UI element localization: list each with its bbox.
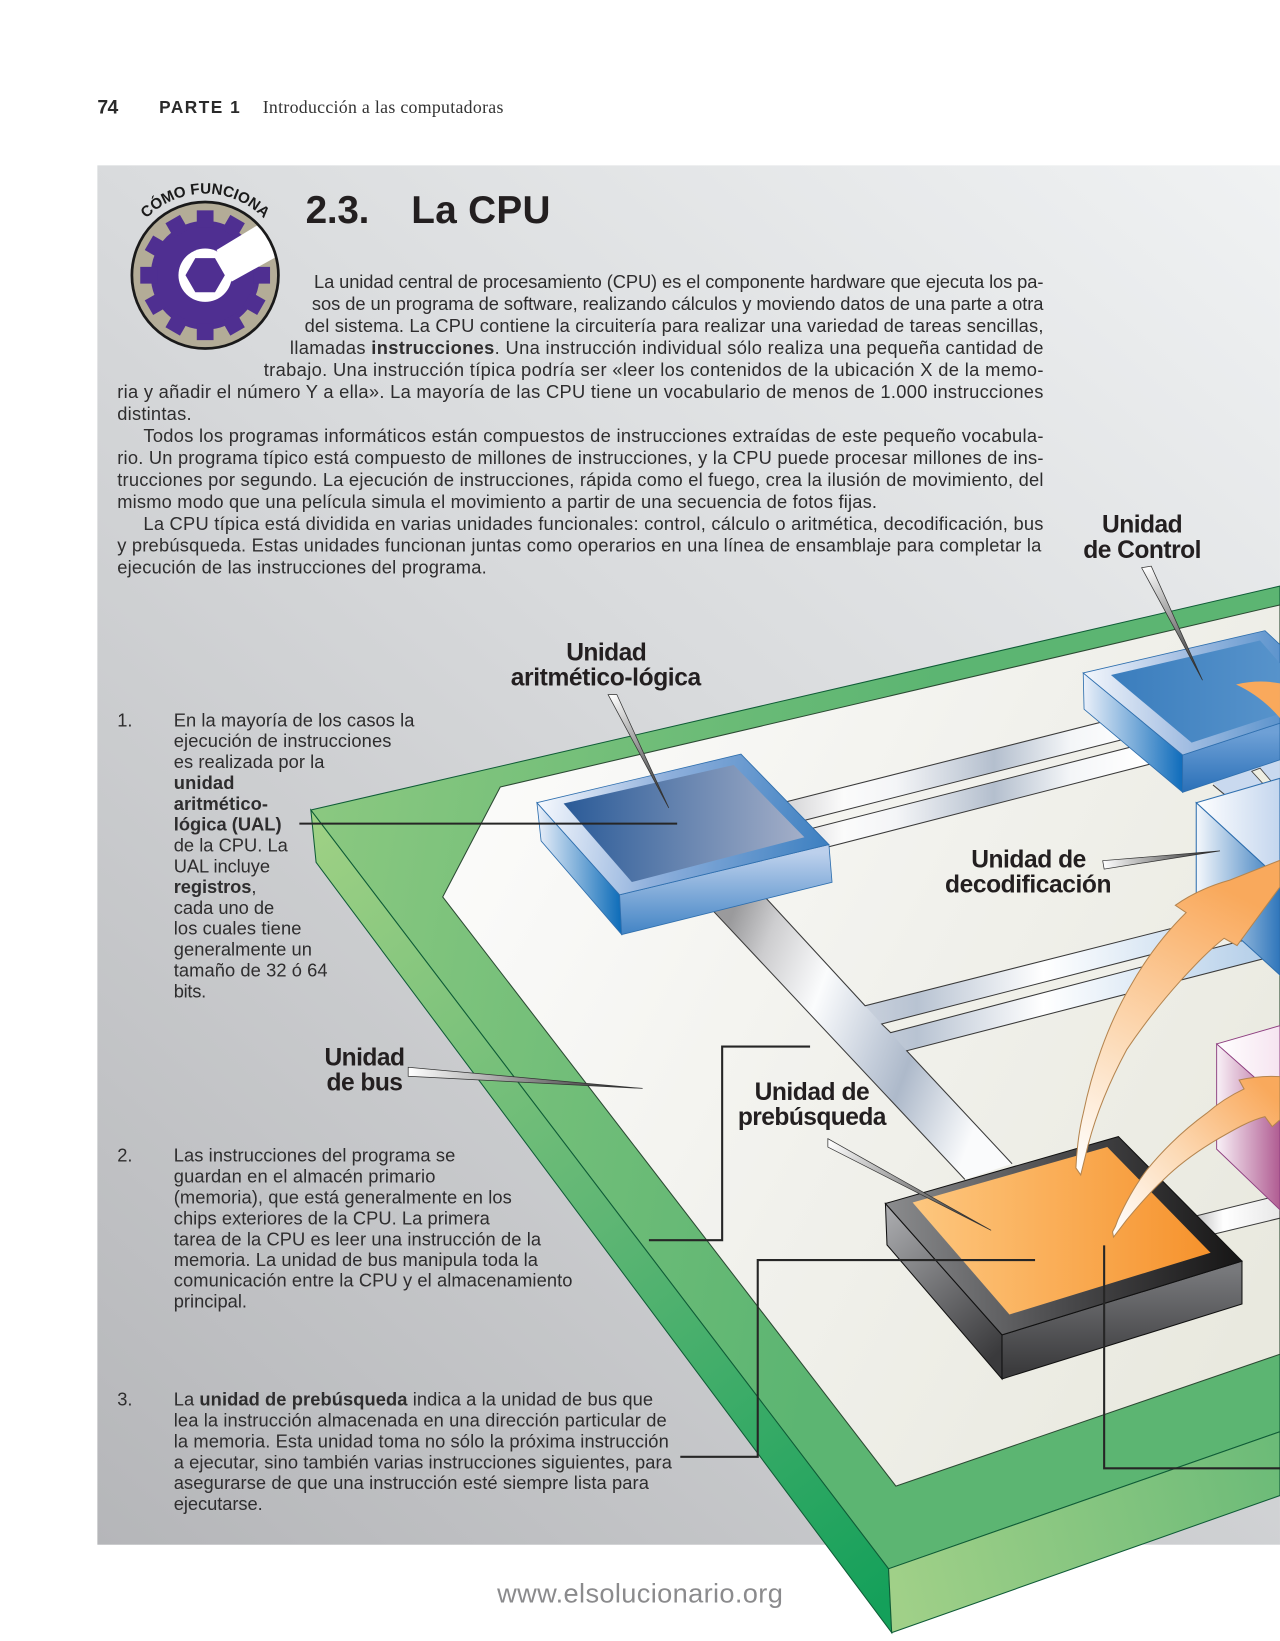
board inner white surface <box>443 605 1280 1486</box>
label: unidad de prebusqueda: Unidad de <box>755 1079 870 1106</box>
text block: step 1 <box>117 709 415 1001</box>
title: 2.3. <box>306 189 369 232</box>
text block: step 1: lógica (UAL) <box>174 813 282 834</box>
running header <box>97 96 504 118</box>
text block: step 2: memoria. La unidad de bus manipula toda la <box>174 1249 539 1270</box>
text block: step 3 <box>117 1389 673 1514</box>
connector between control and decode units <box>1213 760 1280 795</box>
title <box>306 189 551 232</box>
label: unidad de prebusqueda <box>738 1079 991 1230</box>
text block: step 1: unidad <box>174 772 234 793</box>
label: unidad de prebusqueda: prebúsqueda <box>738 1104 887 1131</box>
bus line from the right into fetch unit <box>1183 1195 1280 1239</box>
cube: memory unit <box>1217 1026 1280 1210</box>
leader line: step 3 <box>680 1260 1035 1457</box>
text block: step 1: es realizada por la <box>174 751 325 772</box>
running header: PARTE 1 <box>159 97 240 117</box>
text block: step 3: ejecutarse. <box>174 1493 263 1514</box>
text block: introduction <box>117 271 1044 578</box>
label: unidad aritmetico-logica <box>511 639 702 808</box>
leader line: step 4 <box>1104 1245 1280 1468</box>
label: unidad aritmetico-logica: Unidad <box>566 639 647 666</box>
text block: step 2: (memoria), que está generalmente en los <box>174 1187 512 1208</box>
text block: step 1: bits. <box>174 980 206 1001</box>
text block: step 3: lea la instrucción almacenada en una dirección particular de <box>174 1409 667 1430</box>
label: unidad de decodificacion <box>945 847 1220 899</box>
text block: introduction: La unidad central de procesamiento (CPU) es el componente hardware que ejecuta los pa- <box>314 271 1043 292</box>
text block: step 1: registros, <box>174 876 256 897</box>
label: unidad de control: de Control <box>1083 537 1201 564</box>
text block: step 1: generalmente un <box>174 939 312 960</box>
text block: step 2: comunicación entre la CPU y el almacenamiento <box>174 1270 572 1291</box>
text block: introduction: distintas. <box>117 403 192 424</box>
chip: arithmetic logic unit <box>537 754 832 935</box>
text block: step 2: Las instrucciones del programa se <box>174 1145 455 1166</box>
board front side <box>889 1432 1280 1633</box>
label: unidad aritmetico-logica: aritmético-lógica <box>511 664 702 691</box>
bus lines between arithmetic unit and control unit <box>770 718 1168 852</box>
label: unidad de control: Unidad <box>1102 512 1183 539</box>
watermark: www.elsolucionario.org <box>496 1577 783 1608</box>
text block: introduction: Todos los programas informáticos están compuestos de instrucciones extraídas de este pequeño vocabula- <box>143 425 1043 446</box>
text block: step 2: tarea de la CPU es leer una instrucción de la <box>174 1228 542 1249</box>
text block: step 2: guardan en el almacén primario <box>174 1166 435 1187</box>
leader line: step 1 <box>299 823 677 825</box>
text block: step 1: UAL incluye <box>174 855 270 876</box>
label: unidad de decodificacion: Unidad de <box>971 847 1086 874</box>
text block: introduction: rio. Un programa típico está compuesto de millones de instrucciones, y la CPU puede procesar millones de ins- <box>117 447 1043 468</box>
chip: control unit <box>1083 631 1280 792</box>
board left side <box>311 810 892 1633</box>
label: unidad de control <box>1083 512 1203 680</box>
text block: step 3: la memoria. Esta unidad toma no sólo la próxima instrucción <box>174 1430 669 1451</box>
text block: introduction: mismo modo que una película simula el movimiento a partir de una secuencia de fotos fijas. <box>117 491 877 512</box>
text block: step 3: La unidad de prebúsqueda indica a la unidad de bus que <box>174 1389 653 1410</box>
label: unidad de bus: Unidad <box>324 1044 405 1071</box>
callout lines <box>299 824 1280 1468</box>
text block: step 2 <box>117 1145 572 1312</box>
chip: prefetch unit <box>885 1137 1242 1379</box>
panel: gray background <box>97 165 1280 1545</box>
text block: step 1: cada uno de <box>174 897 274 918</box>
text block: introduction: ria y añadir el número Y a ella». La mayoría de las CPU tiene un vocabulario de menos de 1.000 instrucciones <box>117 381 1043 402</box>
text block: introduction: trabajo. Una instrucción típica podría ser «leer los contenidos de la ubicación X de la memo- <box>264 359 1043 380</box>
text block: step 1: tamaño de 32 ó 64 <box>174 959 328 980</box>
label: unidad de bus: de bus <box>327 1070 403 1097</box>
text block: step 1: de la CPU. La <box>174 834 289 855</box>
text block: introduction: ejecución de las instrucciones del programa. <box>117 557 487 578</box>
text block: step 2: 2. <box>117 1145 133 1166</box>
arrow: prefetch to memory <box>1113 1076 1280 1237</box>
text block: step 3: asegurarse de que una instrucción esté siempre lista para <box>174 1472 650 1493</box>
arrow: prefetch to decode <box>1076 860 1280 1175</box>
text block: step 3: 3. <box>117 1389 133 1410</box>
label: unidad de bus <box>324 1044 643 1097</box>
bus lines to fetch and decode units <box>714 898 1280 1179</box>
illustration: circuit board <box>311 586 1280 1633</box>
cube: decode unit <box>1196 778 1280 975</box>
text block: step 1: ejecución de instrucciones <box>174 730 391 751</box>
text block: introduction: y prebúsqueda. Estas unidades funcionan juntas como operarios en una línea de ensamblaje para completar la <box>117 535 1042 556</box>
text block: introduction: sos de un programa de software, realizando cálculos y moviendo datos de una parte a otra <box>312 293 1044 314</box>
running header: Introducción a las computadoras <box>263 97 504 117</box>
title: La CPU <box>411 189 551 232</box>
text block: introduction: La CPU típica está dividida en varias unidades funcionales: control, cálculo o aritmética, decodificación, bus <box>143 513 1043 534</box>
text block: step 1: los cuales tiene <box>174 918 301 939</box>
leader line: step 2 <box>649 1047 810 1240</box>
icon: como funciona gear badge <box>130 183 280 350</box>
text block: introduction: trucciones por segundo. La ejecución de instrucciones, rápida como el fuego, crea la ilusión de movimiento, del <box>117 469 1043 490</box>
text block: step 1: 1. <box>117 709 133 730</box>
label: unidad de decodificacion: decodificación <box>945 872 1111 899</box>
text block: introduction: llamadas instrucciones. Una instrucción individual sólo realiza una pequeña cantidad de <box>290 337 1043 358</box>
icon: como funciona gear badge: CÓMO FUNCIONA <box>142 183 268 218</box>
text block: step 3: a ejecutar, sino también varias instrucciones siguientes, para <box>174 1451 673 1472</box>
text block: step 1: En la mayoría de los casos la <box>174 709 415 730</box>
text block: step 2: chips exteriores de la CPU. La primera <box>174 1207 491 1228</box>
arrow head on control unit <box>1236 682 1280 718</box>
board top face <box>311 586 1280 1569</box>
text block: step 2: principal. <box>174 1291 247 1312</box>
text block: step 1: aritmético- <box>174 793 268 814</box>
text block: introduction: del sistema. La CPU contiene la circuitería para realizar una variedad de tareas sencillas, <box>305 315 1043 336</box>
running header: 74 <box>97 96 119 118</box>
